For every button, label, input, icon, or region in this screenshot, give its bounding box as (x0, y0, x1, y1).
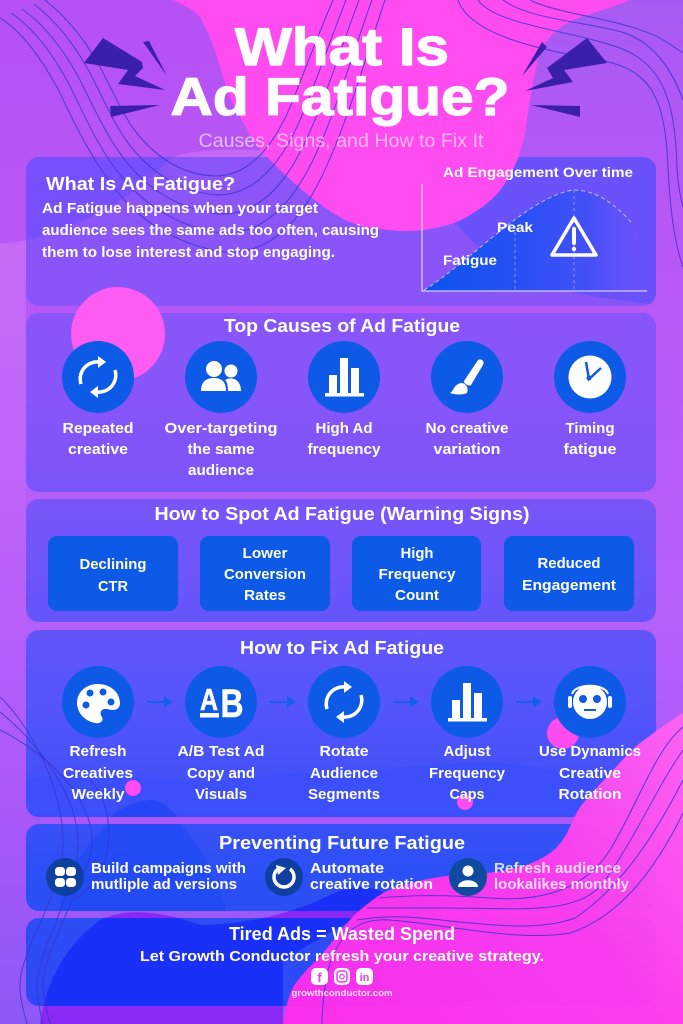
website url: growthconductor.com (292, 988, 392, 999)
tip: automate creative rotation (265, 858, 433, 896)
card: lower conversion rates: Rates (244, 587, 286, 604)
text block: cta: Let Growth Conductor refresh your creative strategy. (140, 949, 544, 965)
panel: how to fix ad fatigue (62, 638, 641, 803)
card: reduced engagement: Engagement (522, 577, 616, 594)
chart: ad engagement over time (422, 164, 647, 291)
panel: what is ad fatigue (42, 164, 647, 291)
arrow (516, 698, 540, 706)
icon: warning triangle (552, 218, 596, 255)
step: adjust frequency caps: Frequency (429, 765, 506, 782)
tip: multiple ad versions: Build campaigns with (91, 861, 246, 877)
text block: definition: audience sees the same ads too often, causing (42, 223, 379, 239)
step: refresh creatives weekly (62, 666, 134, 803)
tip: refresh audience lookalikes: Refresh audience (494, 861, 621, 877)
title: What Is (235, 18, 449, 77)
step: dynamic creative rotation: Use Dynamics (539, 743, 641, 760)
step: adjust frequency caps: Caps (450, 786, 484, 803)
card: declining ctr: Declining (80, 556, 146, 573)
title: Ad Fatigue? (170, 68, 510, 127)
cause: high ad frequency (308, 341, 381, 458)
cause: over-targeting: Over-targeting (164, 420, 278, 437)
heading: How to Fix Ad Fatigue (240, 638, 444, 658)
cause: timing fatigue (554, 341, 626, 458)
step: rotate audience segments: Rotate (320, 743, 368, 760)
cause: repeated creative (62, 341, 134, 458)
step: refresh creatives weekly: Creatives (63, 765, 133, 782)
tip: automate creative rotation: creative rotation (310, 877, 433, 893)
chart: ad engagement over time: Fatigue (443, 252, 497, 268)
card: high frequency count: Count (395, 587, 439, 604)
cause: timing fatigue: Timing (566, 420, 614, 437)
chart: ad engagement over time: Peak (497, 219, 533, 235)
card: high frequency count: Frequency (378, 566, 456, 583)
tip: refresh audience lookalikes: lookalikes monthly (494, 877, 629, 893)
cause: over-targeting: audience (188, 462, 254, 479)
step: a/b test: Copy and (187, 765, 255, 782)
step: a/b test (178, 666, 264, 803)
step: a/b test: Visuals (195, 786, 247, 803)
card: declining ctr: CTR (98, 578, 128, 595)
cause: no creative variation (426, 341, 508, 458)
step: a/b test: A (200, 682, 218, 717)
step: refresh creatives weekly: Refresh (70, 743, 126, 760)
panel: warning signs (48, 504, 634, 611)
panel: prevention backdrop (26, 824, 656, 911)
panel: causes backdrop (26, 313, 656, 492)
tip: refresh audience lookalikes (449, 858, 629, 896)
cause: repeated creative: creative (68, 441, 128, 458)
cause: high ad frequency: frequency (308, 441, 381, 458)
card: reduced engagement: Reduced (538, 555, 600, 572)
step: rotate audience segments: Segments (308, 786, 380, 803)
step: refresh creatives weekly: Weekly (72, 786, 125, 803)
card: declining ctr (48, 536, 178, 611)
card: high frequency count: High (400, 545, 434, 562)
icon: facebook (311, 968, 328, 985)
step: dynamic creative rotation (539, 666, 641, 803)
step: dynamic creative rotation: Creative (559, 765, 621, 782)
panel: preventing future fatigue (46, 833, 629, 896)
cause: high ad frequency: High Ad (316, 420, 372, 437)
arrow (147, 698, 171, 706)
cause: over-targeting (164, 341, 278, 479)
step: rotate audience segments (308, 666, 380, 803)
heading: Top Causes of Ad Fatigue (224, 316, 460, 336)
heading: How to Spot Ad Fatigue (Warning Signs) (154, 504, 530, 524)
icon: left lightning burst (84, 38, 167, 117)
step: adjust frequency caps: Adjust (444, 743, 490, 760)
arrow (393, 698, 417, 706)
icon: linkedin (356, 968, 373, 985)
icon: instagram (334, 968, 350, 985)
card: lower conversion rates: Conversion (224, 566, 306, 583)
tip: multiple ad versions: mutliple ad versions (91, 877, 237, 893)
cause: no creative variation: No creative (426, 420, 508, 437)
panel: what is backdrop (26, 157, 656, 306)
subtitle: Causes, Signs, and How to Fix It (198, 131, 484, 152)
title (170, 18, 510, 127)
step: a/b test: B (220, 682, 244, 726)
icon: right lightning burst (522, 38, 607, 117)
arrow (270, 698, 294, 706)
tip: multiple ad versions (46, 858, 246, 896)
text block: definition: them to lose interest and stop engaging. (42, 245, 335, 261)
chart: ad engagement over time: Ad Engagement Over time (443, 164, 633, 180)
step: adjust frequency caps (429, 666, 506, 803)
card: reduced engagement (504, 536, 634, 611)
panel: call to action (140, 924, 544, 999)
card: high frequency count (352, 536, 481, 611)
heading: What Is Ad Fatigue? (46, 174, 235, 194)
cause: no creative variation: variation (434, 441, 500, 458)
step: rotate audience segments: Audience (310, 765, 378, 782)
step: a/b test: A/B Test Ad (178, 743, 264, 760)
text block: definition: Ad Fatigue happens when your target (42, 201, 318, 217)
cause: over-targeting: the same (188, 441, 254, 458)
cause: repeated creative: Repeated (62, 420, 134, 437)
panel: fixes backdrop (26, 630, 656, 817)
heading: Tired Ads = Wasted Spend (229, 924, 455, 944)
icon: linkedin: in (360, 972, 370, 984)
icon: facebook: f (317, 970, 322, 985)
heading: Preventing Future Fatigue (219, 833, 465, 853)
panel: top causes of ad fatigue (62, 316, 626, 479)
cause: timing fatigue: fatigue (564, 441, 616, 458)
text block: definition (42, 201, 379, 261)
panel: call to action backdrop (26, 918, 656, 1006)
card: lower conversion rates: Lower (242, 545, 288, 562)
tip: automate creative rotation: Automate (310, 861, 384, 877)
panel: warning signs backdrop (26, 499, 656, 622)
step: dynamic creative rotation: Rotation (558, 786, 622, 803)
card: lower conversion rates (200, 536, 330, 611)
